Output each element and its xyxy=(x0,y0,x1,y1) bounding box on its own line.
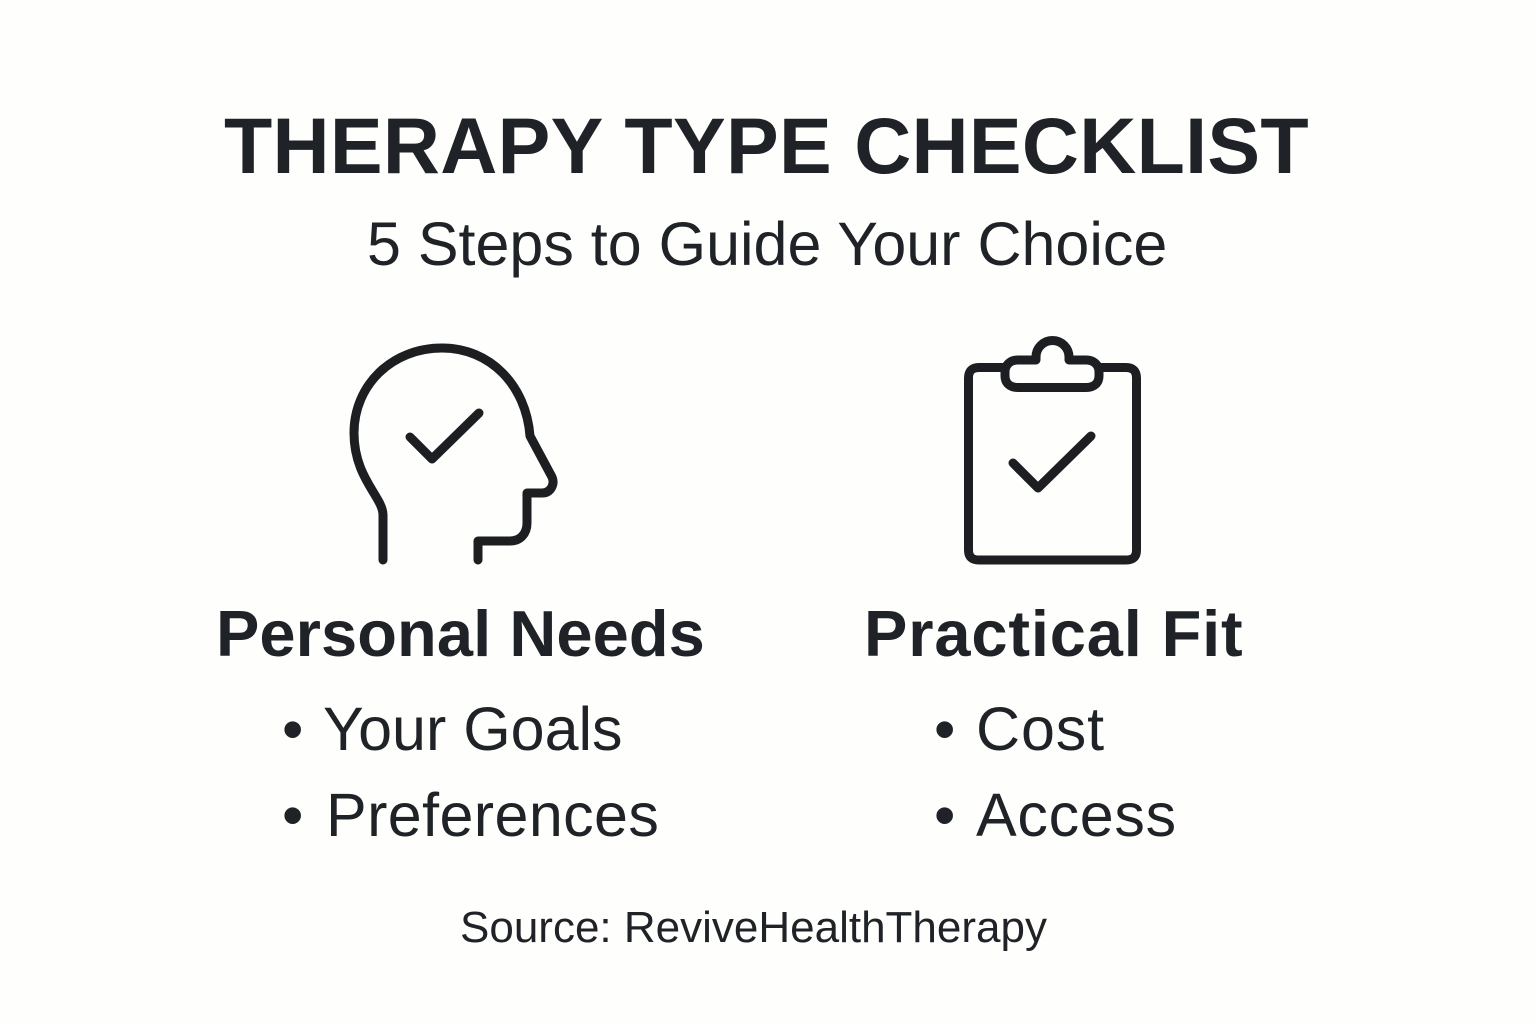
list item: cost: • xyxy=(934,695,955,763)
heading: practical fit: Practical Fit xyxy=(864,597,1244,670)
list item: preferences: Preferences xyxy=(326,781,659,849)
list item: cost: Cost xyxy=(976,695,1105,763)
list item: access: Access xyxy=(976,781,1177,849)
list item: access: • xyxy=(934,781,955,849)
source: Source: ReviveHealthTherapy xyxy=(460,903,1047,952)
heading: personal needs: Personal Needs xyxy=(216,597,705,670)
icon: head with check xyxy=(350,344,558,564)
list item: your goals: • xyxy=(282,695,303,763)
subtitle: 5 Steps to Guide Your Choice xyxy=(367,210,1167,278)
list item: preferences: • xyxy=(282,781,303,849)
list item: your goals: Your Goals xyxy=(323,695,623,763)
icon: clipboard with check xyxy=(964,336,1141,564)
title: THERAPY TYPE CHECKLIST xyxy=(224,101,1309,190)
